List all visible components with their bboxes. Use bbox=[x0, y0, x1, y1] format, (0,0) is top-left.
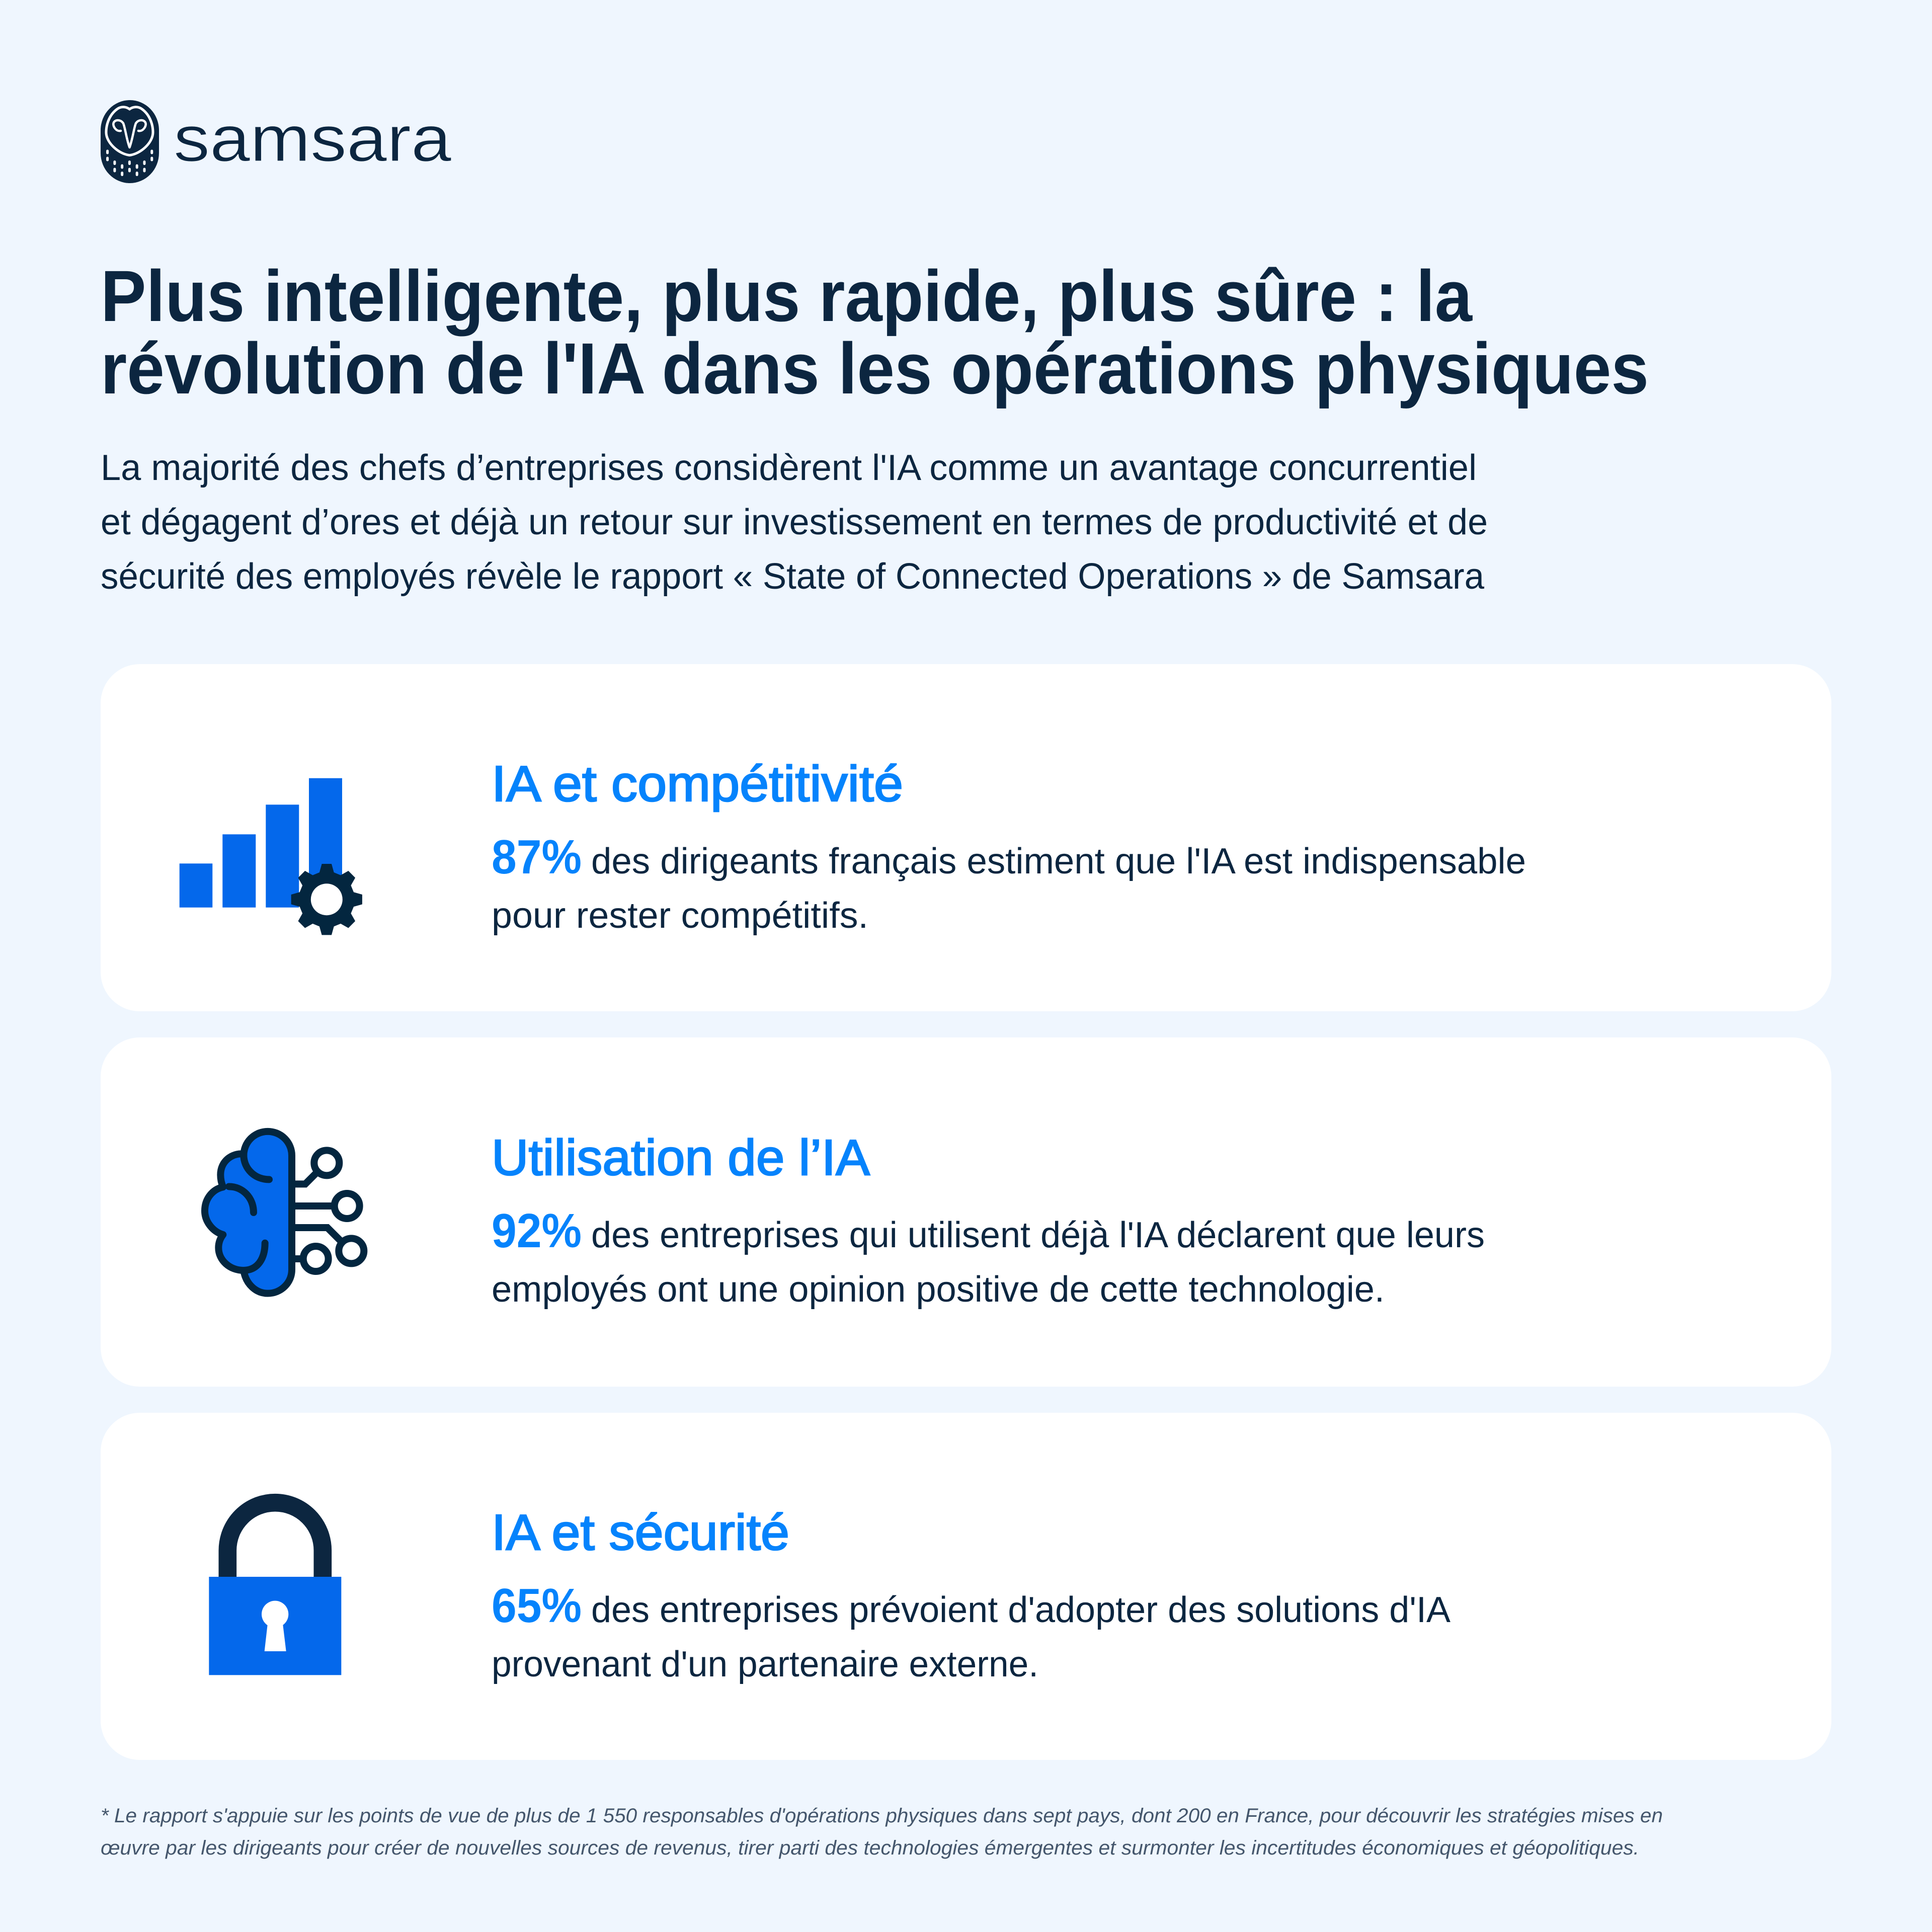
stat text: 92%: des entreprises qui utilisent déjà l'IA déclarent que leurs bbox=[591, 1215, 1485, 1255]
intro text block: La majorité des chefs d’entreprises considèrent l'IA comme un avantage concurrentiel bbox=[101, 448, 1477, 488]
stat text: 65%: des entreprises prévoient d'adopter des solutions d'IA bbox=[591, 1590, 1451, 1630]
panel: IA et compétitivité bbox=[101, 664, 1831, 1011]
stat text: 92%: 92% bbox=[492, 1204, 582, 1258]
icon: brain with circuits bbox=[205, 1132, 364, 1294]
icon: padlock bbox=[209, 1503, 341, 1675]
icon: bar chart with gear bbox=[180, 778, 362, 935]
stat text: 87%: pour rester compétitifs. bbox=[492, 896, 868, 936]
stat text: 87% bbox=[492, 830, 1526, 936]
logo: samsara bbox=[101, 100, 451, 183]
title bbox=[101, 256, 1649, 409]
heading: IA et sécurité: IA et sécurité bbox=[492, 1504, 789, 1561]
intro text block: et dégagent d’ores et déjà un retour sur investissement en termes de productivité et de bbox=[101, 502, 1488, 542]
intro text block: sécurité des employés révèle le rapport « State of Connected Operations » de Samsara bbox=[101, 556, 1485, 597]
stat text: 65%: provenant d'un partenaire externe. bbox=[492, 1644, 1038, 1684]
footnote bbox=[101, 1805, 1663, 1859]
footnote: œuvre par les dirigeants pour créer de nouvelles sources de revenus, tirer parti des technologies émergentes et surmonter les incertitudes économiques et géopolitiques. bbox=[101, 1837, 1639, 1859]
icon: owl badge bbox=[101, 100, 159, 183]
title: révolution de l'IA dans les opérations physiques bbox=[101, 328, 1649, 409]
stat text: 92%: employés ont une opinion positive de cette technologie. bbox=[492, 1269, 1385, 1310]
footnote: * Le rapport s'appuie sur les points de vue de plus de 1 550 responsables d'opérations physiques dans sept pays, dont 200 en France, pour découvrir les stratégies mises en bbox=[101, 1805, 1663, 1827]
panel: IA et sécurité bbox=[101, 1413, 1831, 1760]
stat text: 92% bbox=[492, 1204, 1485, 1310]
stat text: 65%: 65% bbox=[492, 1579, 582, 1633]
panel: Utilisation de l’IA bbox=[101, 1037, 1831, 1387]
logo wordmark: samsara bbox=[174, 103, 451, 175]
stat text: 65% bbox=[492, 1579, 1451, 1684]
title: plus rapide, plus sûre : la bbox=[662, 256, 1473, 337]
intro text block bbox=[101, 448, 1488, 597]
title: Plus intelligente, bbox=[101, 256, 643, 337]
stat text: 87%: 87% bbox=[492, 830, 582, 884]
heading: IA et compétitivité: IA et compétitivité bbox=[492, 756, 903, 812]
heading: Utilisation de l’IA: Utilisation de l’IA bbox=[492, 1130, 870, 1186]
stat text: 87%: des dirigeants français estiment que l'IA est indispensable bbox=[591, 841, 1526, 881]
